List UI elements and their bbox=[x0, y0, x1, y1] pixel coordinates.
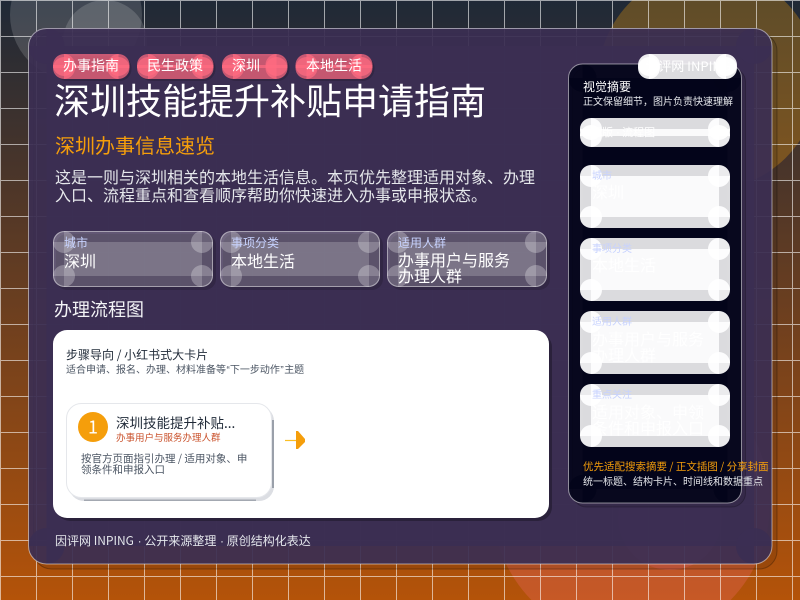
title: 深圳技能提升补贴申请指南 bbox=[54, 73, 486, 125]
tag: 民生政策: 民生政策 bbox=[147, 56, 203, 76]
summary card: 事项分类: 本地生活 bbox=[592, 252, 656, 276]
summary card: 适用人群: 办事用户与服务 bbox=[592, 326, 704, 350]
meta card: 适用人群: 办事用户与服务 bbox=[398, 247, 510, 271]
summary card: format: 竖版 · 流程图 bbox=[591, 124, 655, 140]
tag: 深圳: 深圳 bbox=[232, 56, 260, 76]
flow description: 适合申请、报名、办理、材料准备等“下一步动作”主题 bbox=[66, 361, 304, 376]
meta card: 事项分类: 本地生活 bbox=[231, 248, 295, 272]
tag: 民生政策 bbox=[137, 54, 216, 81]
usage note: 优先适配搜索摘要 / 正文插图 / 分享封面 bbox=[583, 459, 769, 474]
intro paragraph: 这是一则与深圳相关的本地生活信息。本页优先整理适用对象、办理 bbox=[55, 164, 535, 188]
summary card: 适用人群: 办理人群 bbox=[592, 342, 656, 366]
usage description: 统一标题、结构卡片、时间线和数据重点 bbox=[583, 473, 763, 488]
meta card: 事项分类 bbox=[220, 231, 383, 290]
intro paragraph bbox=[55, 164, 535, 206]
step title: 深圳技能提升补贴... bbox=[116, 412, 235, 432]
brand pill: 因评网 INPING bbox=[645, 56, 731, 75]
tag: 深圳 bbox=[222, 54, 290, 81]
summary card: 城市: 深圳 bbox=[592, 179, 624, 203]
summary description: 正文保留细节，图片负责快速理解 bbox=[583, 93, 733, 108]
tag: 本地生活: 本地生活 bbox=[306, 56, 362, 76]
step card bbox=[66, 404, 274, 501]
meta card: 适用人群: 办理人群 bbox=[398, 263, 462, 287]
step number: 1 bbox=[88, 414, 98, 440]
summary heading: 视觉摘要 bbox=[583, 78, 631, 95]
step audience: 办事用户与服务办理人群 bbox=[116, 430, 221, 444]
summary card: format bbox=[580, 118, 730, 147]
summary card: 城市: 城市 bbox=[592, 167, 612, 182]
meta card: 城市: 深圳 bbox=[64, 248, 96, 272]
meta card: 适用人群 bbox=[387, 231, 550, 290]
summary phone panel bbox=[568, 54, 769, 507]
summary card: 城市 bbox=[580, 165, 730, 228]
step number bbox=[78, 412, 108, 442]
step description: 按官方页面指引办理 / 适用对象、申 bbox=[81, 451, 247, 466]
footer: 因评网 INPING · 公开来源整理 · 原创结构化表达 bbox=[55, 532, 311, 549]
brand pill bbox=[638, 54, 737, 79]
summary card: 重点关注: 条件和申报入口 bbox=[592, 415, 704, 439]
tag: 本地生活 bbox=[296, 54, 374, 81]
summary card: 事项分类: 事项分类 bbox=[592, 240, 632, 255]
section heading: 办理流程图 bbox=[54, 296, 144, 322]
tag: 办事指南 bbox=[53, 54, 132, 81]
summary card: 适用人群: 适用人群 bbox=[592, 313, 632, 328]
meta card: 城市: 城市 bbox=[64, 234, 88, 251]
summary card: 事项分类 bbox=[580, 238, 730, 301]
meta card: 事项分类: 事项分类 bbox=[231, 234, 279, 251]
summary card: 重点关注: 重点关注 bbox=[592, 386, 632, 401]
intro paragraph: 入口、流程重点和查看顺序帮助你快速进入办事或申报状态。 bbox=[55, 182, 487, 206]
step description: 领条件和申报入口 bbox=[81, 462, 165, 477]
step description bbox=[81, 451, 247, 477]
summary card: 重点关注: 适用对象、申领 bbox=[592, 399, 704, 423]
flow heading: 步骤导向 / 小红书式大卡片 bbox=[66, 346, 208, 363]
flow chart panel bbox=[53, 330, 552, 521]
tag: 办事指南: 办事指南 bbox=[63, 56, 119, 76]
subtitle: 深圳办事信息速览 bbox=[55, 130, 215, 159]
arrow bbox=[285, 431, 305, 449]
summary card: 重点关注 bbox=[580, 384, 730, 447]
summary card: 适用人群 bbox=[580, 311, 730, 374]
meta card: 城市 bbox=[53, 231, 216, 290]
meta card: 适用人群: 适用人群 bbox=[398, 234, 446, 251]
